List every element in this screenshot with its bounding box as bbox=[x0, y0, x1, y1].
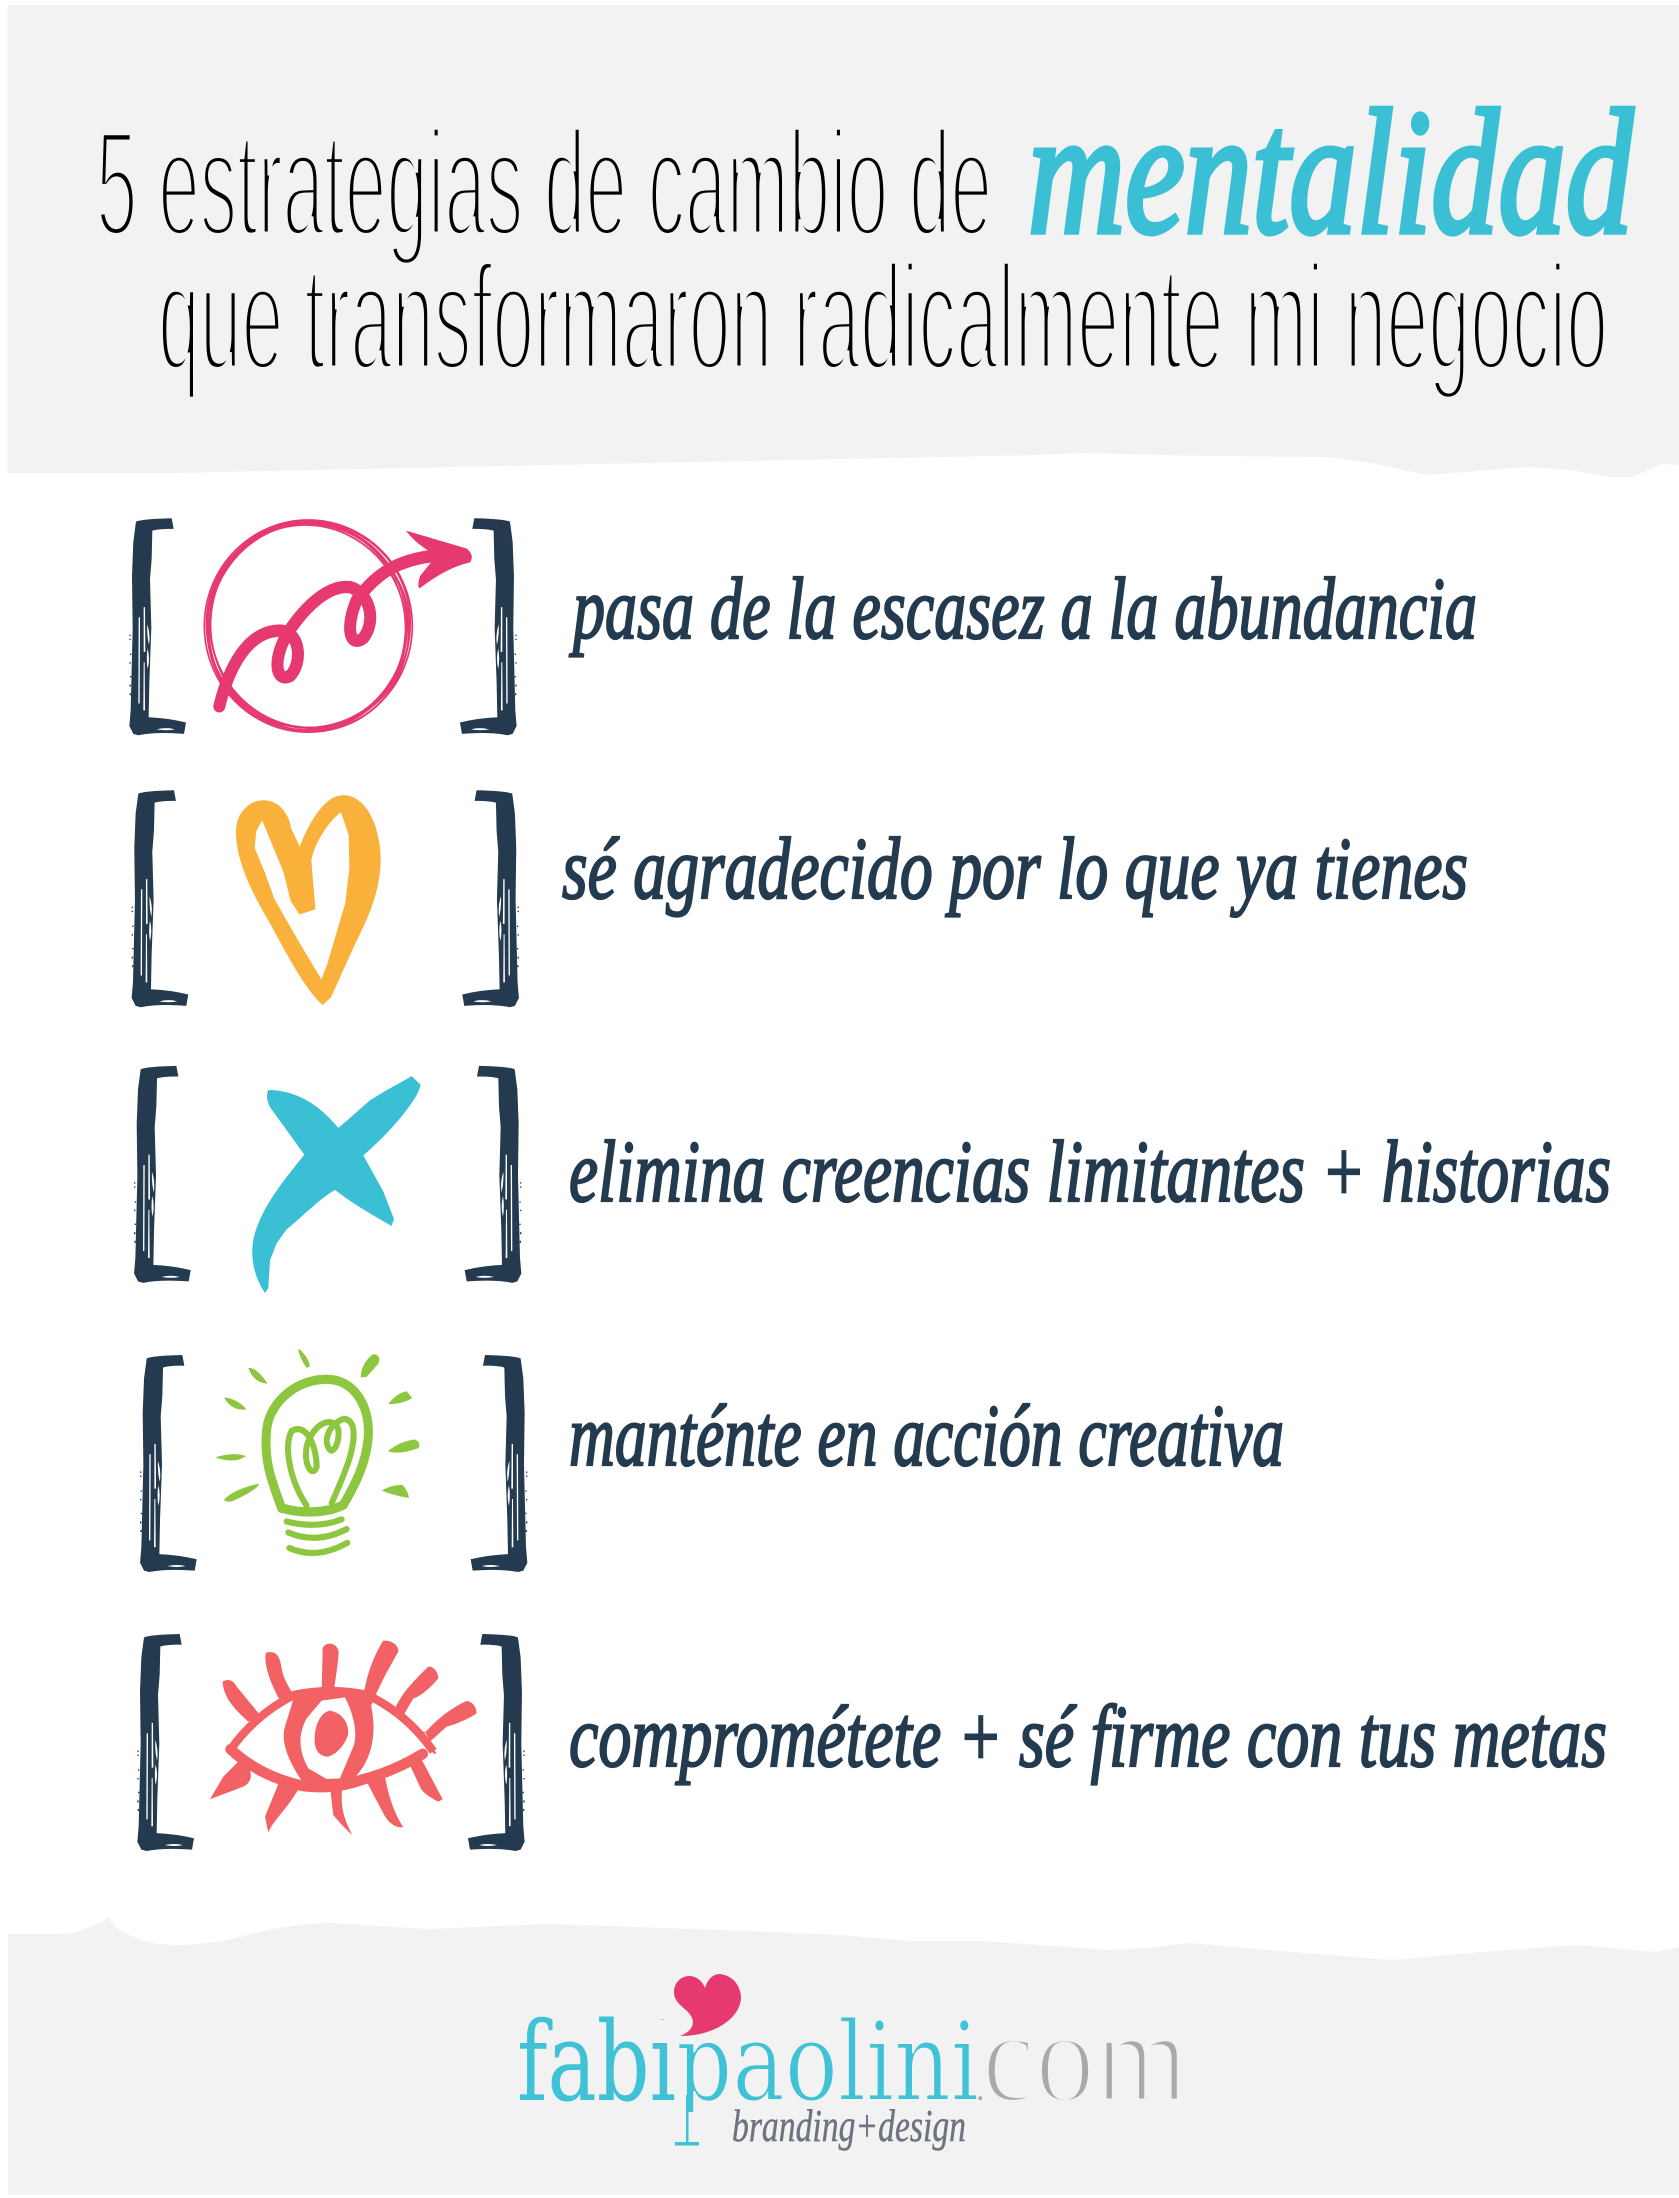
icon: light bulb bbox=[215, 1349, 419, 1553]
row 5 brackets bbox=[137, 1634, 525, 1851]
row 4 brackets bbox=[140, 1355, 527, 1572]
logo: fabi: fabi bbox=[517, 1998, 676, 2126]
panel: footer background bbox=[8, 1917, 1679, 2195]
icon: brush X bbox=[252, 1076, 421, 1293]
icon: eye with lashes bbox=[210, 1641, 477, 1835]
row 3 brackets bbox=[134, 1066, 521, 1283]
logo: paolini: paolini bbox=[676, 1998, 979, 2126]
logo: branding + design: branding+design bbox=[732, 2100, 966, 2151]
icon: scribbled circle with spiral arrow bbox=[169, 483, 472, 770]
logo: p descender bbox=[675, 2095, 699, 2146]
row 4 text: manténte en acción creativa bbox=[569, 1388, 1284, 1485]
row 1 brackets bbox=[129, 518, 517, 735]
logo bbox=[517, 1974, 1188, 2151]
logo: .com: com bbox=[982, 1983, 1188, 2130]
icon: hand drawn heart bbox=[237, 797, 379, 1003]
title bbox=[96, 73, 1634, 401]
logo: .com: . bbox=[976, 2071, 984, 2108]
logo: heart bbox=[674, 1974, 741, 2036]
panel: header background bbox=[8, 5, 1679, 477]
row 2 brackets bbox=[132, 790, 519, 1007]
